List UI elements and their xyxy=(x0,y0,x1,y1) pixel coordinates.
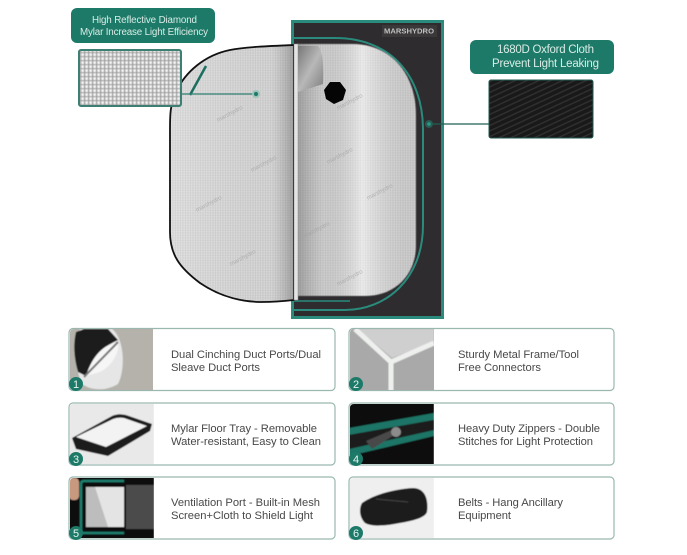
callout label: Prevent Light Leaking xyxy=(492,58,599,70)
image: zipper xyxy=(349,403,434,465)
callout label xyxy=(71,8,215,43)
number badge 3: 3 xyxy=(73,454,79,466)
number badge 5: 5 xyxy=(73,528,79,540)
oxford swatch xyxy=(489,80,593,138)
open door: mylar with black edge xyxy=(170,45,294,302)
callout label: Mylar Increase Light Efficiency xyxy=(80,27,208,38)
feature text: Equipment xyxy=(458,510,512,522)
callout: diamond mylar xyxy=(71,8,260,106)
feature text: Free Connectors xyxy=(458,362,541,374)
panel: feature 3 floor tray xyxy=(69,403,335,466)
number badge 2: 2 xyxy=(353,379,359,391)
panel: feature 2 metal frame xyxy=(349,328,614,391)
feature text: Screen+Cloth to Shield Light xyxy=(171,510,314,522)
door hinge strip xyxy=(294,44,298,300)
feature text: Water-resistant, Easy to Clean xyxy=(171,436,321,448)
feature text xyxy=(171,423,321,448)
tent illustration xyxy=(170,22,442,318)
number badge 2 xyxy=(349,377,363,391)
feature text: Dual Cinching Duct Ports/Dual xyxy=(171,349,321,361)
number badge 3 xyxy=(69,452,83,466)
icon: duct hole xyxy=(324,82,346,104)
callout label xyxy=(470,40,614,74)
number badge 4 xyxy=(349,452,363,466)
teal zipper line xyxy=(294,38,423,310)
watermarks: marshydro xyxy=(366,183,395,202)
feature text: Sturdy Metal Frame/Tool xyxy=(458,349,579,361)
watermarks: marshydro xyxy=(195,195,224,214)
image: belts xyxy=(349,477,434,539)
watermarks xyxy=(195,93,395,288)
feature text: Stitches for Light Protection xyxy=(458,436,593,448)
leader line with dot xyxy=(182,90,260,98)
number badge 6 xyxy=(349,526,363,540)
feature text xyxy=(171,349,321,374)
door strap xyxy=(190,66,206,95)
tent body: black oxford cloth with teal border xyxy=(292,22,442,318)
watermarks: marshydro xyxy=(326,147,355,166)
image: ventilation port xyxy=(69,477,154,539)
mylar swatch xyxy=(79,50,181,106)
image: duct port xyxy=(69,328,154,391)
icon: duct sleeve xyxy=(298,46,323,92)
number badge 4: 4 xyxy=(353,454,359,466)
feature text xyxy=(458,423,600,448)
watermarks: marshydro xyxy=(229,249,258,268)
image: frame connector xyxy=(349,328,435,391)
image: floor tray xyxy=(69,403,154,465)
panel: feature 6 belts xyxy=(349,477,614,540)
watermarks: marshydro xyxy=(336,269,365,288)
number badge 1: 1 xyxy=(73,379,79,391)
feature text: Heavy Duty Zippers - Double xyxy=(458,423,600,435)
feature text xyxy=(458,497,563,522)
feature text: Belts - Hang Ancillary xyxy=(458,497,563,509)
lower zipper strip xyxy=(294,300,350,302)
number badge 1 xyxy=(69,377,83,391)
watermarks: marshydro xyxy=(250,155,279,174)
watermarks: marshydro xyxy=(216,105,245,124)
callout label: 1680D Oxford Cloth xyxy=(497,44,594,56)
feature text: Sleave Duct Ports xyxy=(171,362,260,374)
number badge 6: 6 xyxy=(353,528,359,540)
logo: Mars Hydro xyxy=(382,25,437,37)
panel: feature 4 zippers xyxy=(349,403,614,466)
watermarks: marshydro xyxy=(336,93,365,112)
feature text: Mylar Floor Tray - Removable xyxy=(171,423,317,435)
number badge 5 xyxy=(69,526,83,540)
callout: oxford cloth xyxy=(425,40,614,138)
tent back wall: mylar xyxy=(297,44,416,296)
watermarks: marshydro xyxy=(303,221,332,240)
logo: Mars Hydro: MARSHYDRO xyxy=(384,26,434,36)
callout label: High Reflective Diamond xyxy=(92,15,197,26)
panel: feature 5 ventilation port xyxy=(69,477,335,540)
feature text xyxy=(171,497,320,522)
panel: feature 1 duct ports xyxy=(69,328,335,391)
leader line with dot xyxy=(425,120,489,128)
feature text: Ventilation Port - Built-in Mesh xyxy=(171,497,320,509)
feature text xyxy=(458,349,579,374)
